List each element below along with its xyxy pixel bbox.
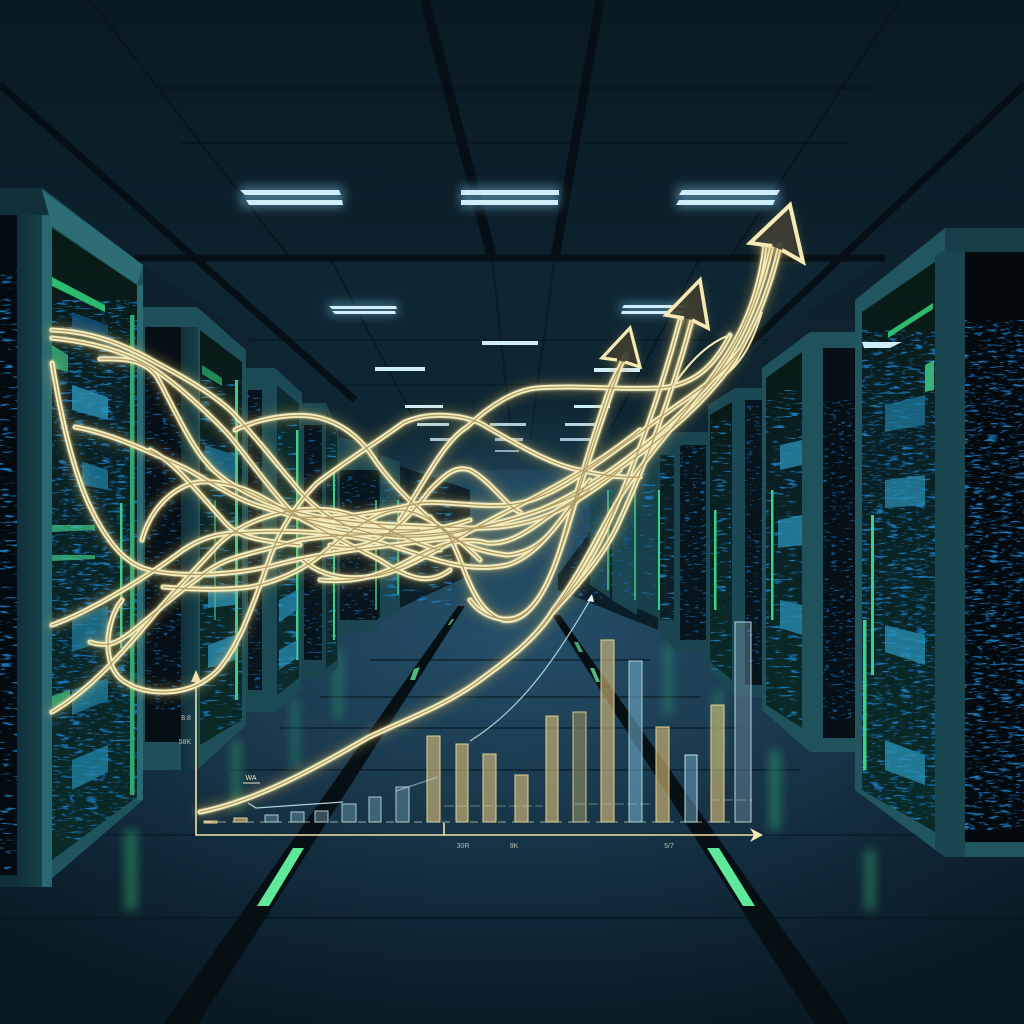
ceiling	[0, 0, 1024, 480]
rack R1	[855, 228, 1024, 857]
chart labels: 30R	[457, 843, 469, 850]
left server racks	[0, 188, 338, 887]
distant racks	[338, 437, 658, 637]
chart labels	[179, 715, 674, 850]
thin trend lines	[248, 600, 590, 808]
right server racks	[637, 228, 1024, 857]
axis arrowheads	[191, 670, 763, 842]
glass reflections	[862, 342, 902, 348]
dashed baseline	[204, 821, 751, 823]
chart labels: WA	[245, 775, 257, 782]
growth arrowheads	[602, 205, 803, 367]
glowing growth strands	[52, 245, 780, 812]
axes	[196, 675, 756, 835]
chart labels: 5/7	[664, 843, 674, 850]
floor reflections	[125, 645, 875, 910]
arrow: large	[750, 205, 803, 262]
chart labels: 8.8	[181, 715, 191, 722]
chart bars	[204, 622, 751, 823]
thin strands near arrows	[672, 312, 762, 388]
rack L1	[0, 188, 143, 887]
floor guide lines	[163, 606, 850, 1024]
thin trend arrowhead	[587, 594, 594, 602]
bar chart	[179, 594, 763, 850]
arrow: medium	[666, 280, 708, 328]
rack L3	[246, 368, 302, 712]
ceiling lights	[240, 186, 780, 452]
chart labels: 9K	[510, 843, 519, 850]
arrow: small	[602, 328, 640, 367]
rack R2	[762, 332, 855, 752]
floor	[0, 400, 1024, 1024]
rack R4	[637, 432, 708, 650]
rack L2	[143, 307, 246, 770]
rack L4	[302, 403, 338, 678]
rack R3	[708, 388, 762, 697]
chart labels: 58K	[179, 739, 192, 746]
